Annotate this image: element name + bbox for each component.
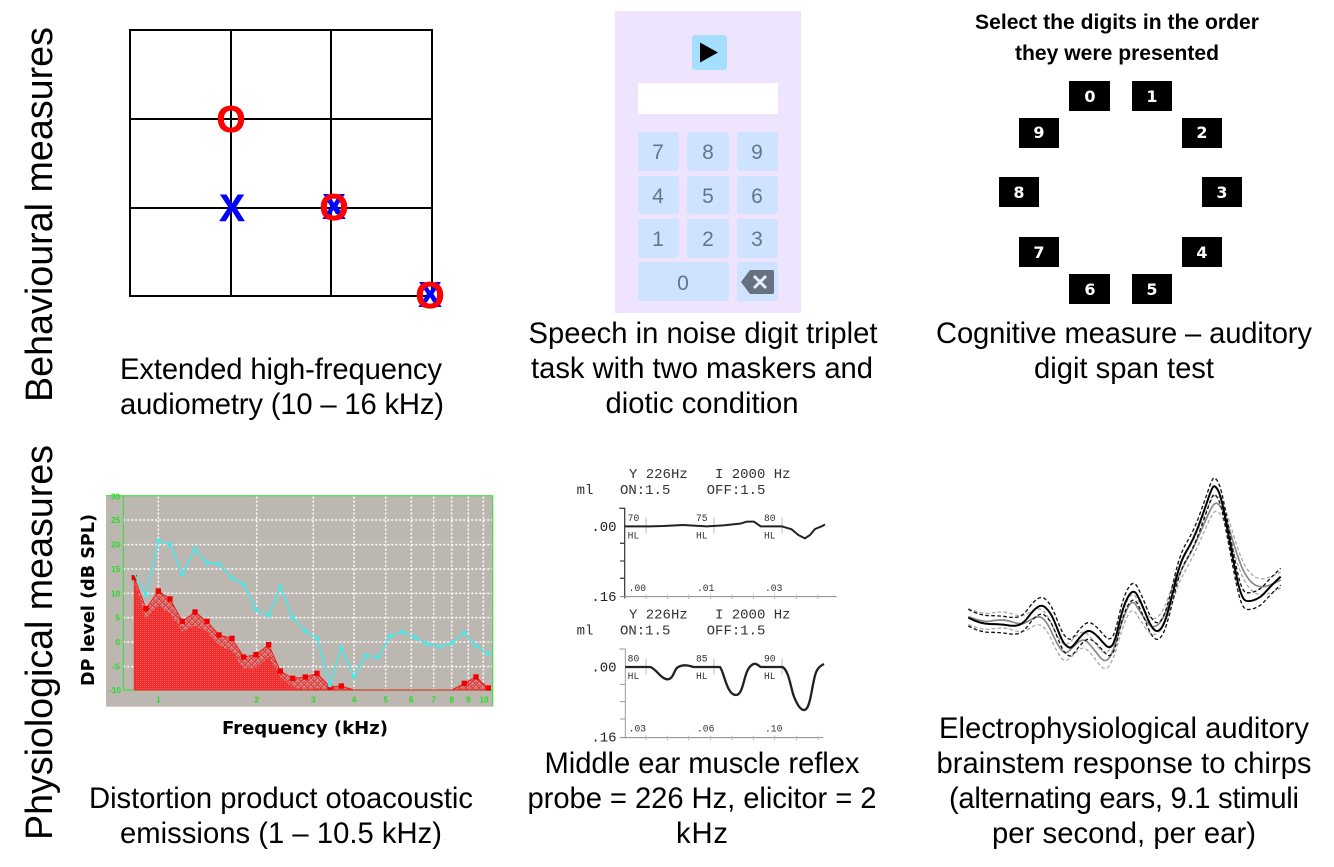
grey mean trace (968, 503, 1281, 661)
row label: physiological measures: Physiological measures (18, 445, 60, 840)
upper reflex trace: 80 (764, 513, 776, 524)
noise floor solid area (134, 580, 330, 690)
audiogram marker: overlapping X and O at centre: X (322, 186, 346, 227)
brainstem response waveforms (968, 478, 1281, 669)
digit buttons in a ring: 3 (1216, 183, 1228, 202)
y axis tick labels: -5 (112, 662, 120, 672)
panel: auditory brainstem response (936, 478, 1312, 850)
answer field (638, 83, 778, 114)
y axis title: DP level (dB SPL) (79, 514, 99, 686)
caption: speech in noise: task with two maskers and (531, 353, 873, 385)
caption: muscle reflex (528, 748, 876, 850)
DPOAE chart (106, 491, 493, 707)
caption: muscle reflex: kHz (676, 818, 728, 850)
lower reflex trace: HL (628, 671, 639, 682)
play button (692, 35, 727, 70)
y axis tick labels: 5 (115, 613, 120, 623)
caption: muscle reflex: probe = 226 Hz, elicitor = 2 (528, 783, 876, 815)
digit keys: 5 (702, 185, 714, 208)
digit buttons in a ring: 1 (1146, 87, 1158, 106)
x axis tick labels: 5 (383, 694, 388, 704)
upper reflex trace: Y 226Hz (629, 467, 688, 483)
x axis tick labels: 1 (156, 694, 161, 704)
caption: brainstem response: per second, per ear) (992, 818, 1256, 850)
lower reflex trace: .00 (591, 661, 617, 677)
lower reflex trace: .03 (629, 724, 646, 735)
cyan DP series (134, 538, 491, 687)
y axis tick labels: -10 (109, 685, 121, 695)
upper reflex trace (577, 467, 837, 606)
upper reflex trace: .01 (697, 583, 715, 594)
lower reflex trace: OFF:1.5 (707, 624, 765, 640)
digit span prompt (975, 11, 1259, 65)
caption: brainstem response: brainstem response to chirps (936, 748, 1312, 780)
y axis tick labels: 0 (115, 637, 120, 647)
caption: otoacoustic emissions: emissions (1 – 10.5 kHz) (120, 818, 442, 850)
digit buttons in a ring: 7 (1033, 243, 1045, 262)
lower reflex trace: .10 (765, 724, 783, 735)
lower reflex trace: HL (696, 671, 708, 682)
digit buttons in a ring: 4 (1196, 243, 1208, 262)
digit span prompt: Select the digits in the order (975, 11, 1259, 34)
digit keys: 2 (702, 228, 714, 251)
caption: brainstem response: (alternating ears, 9.1 stimuli (949, 783, 1299, 815)
digit keys: 3 (751, 228, 763, 251)
caption: audiometry: Extended high-frequency (120, 354, 442, 386)
y axis tick labels (109, 491, 121, 695)
x axis tick labels: 7 (431, 694, 436, 704)
y axis tick labels: 15 (111, 564, 121, 574)
panel: middle ear muscle reflex (528, 467, 876, 850)
caption: speech in noise: Speech in noise digit triplet (528, 318, 878, 350)
icon: backspace (741, 270, 774, 294)
digit keys (638, 132, 778, 301)
lower reflex trace: 85 (696, 654, 708, 665)
row label: behavioural measures: Behavioural measures (18, 27, 60, 402)
digit keys: 7 (652, 141, 664, 164)
digit keys: 8 (702, 141, 714, 164)
x axis tick labels: 9 (466, 694, 471, 704)
audiogram marker: blue X: X (219, 188, 245, 230)
digit buttons in a ring: 0 (1084, 87, 1096, 106)
digit span prompt: they were presented (1015, 42, 1219, 65)
keypad background (615, 11, 801, 313)
audiogram marker: red O: O (217, 99, 245, 140)
audiogram grid (130, 30, 432, 296)
caption: digit span: digit span test (1034, 353, 1214, 385)
upper reflex trace: 75 (696, 513, 708, 524)
red series markers (132, 575, 491, 691)
upper reflex trace: .00 (629, 583, 646, 594)
x axis tick labels: 10 (479, 694, 489, 704)
lower reflex trace: HL (764, 671, 776, 682)
x axis title: Frequency (kHz) (222, 719, 388, 739)
audiogram marker: overlapping X and O at corner: X (418, 274, 442, 315)
panel: distortion product otoacoustic emissions (79, 491, 493, 850)
digit keys: 4 (652, 185, 664, 208)
lower reflex trace: .06 (697, 724, 715, 735)
upper reflex trace: HL (628, 530, 639, 541)
audiogram marker: overlapping X and O at centre: x (326, 193, 340, 220)
digit buttons in a ring (999, 81, 1242, 304)
y axis tick labels: 30 (111, 491, 121, 501)
caption: muscle reflex: Middle ear muscle reflex (544, 748, 860, 780)
upper reflex trace: I 2000 Hz (715, 467, 791, 483)
upper reflex trace: .16 (591, 590, 617, 606)
caption: audiometry: audiometry (10 – 16 kHz) (120, 389, 444, 421)
panel: speech in noise digit triplet task (528, 11, 878, 420)
lower reflex trace: 90 (764, 654, 776, 665)
y axis tick labels: 25 (111, 515, 121, 525)
upper reflex trace: ml (577, 483, 593, 499)
lower reflex trace: Y 226Hz (629, 607, 688, 623)
digit buttons in a ring: 2 (1196, 123, 1208, 142)
caption: brainstem response: Electrophysiological auditory (939, 713, 1309, 745)
x axis tick labels: 3 (311, 694, 316, 704)
audiogram marker: overlapping X and O at corner: x (423, 281, 437, 308)
caption: otoacoustic emissions (89, 783, 473, 850)
caption: speech in noise (528, 318, 878, 420)
digit buttons in a ring: 9 (1033, 123, 1045, 142)
noise floor band (134, 578, 488, 690)
digit keys: 6 (751, 185, 763, 208)
x axis tick labels (156, 694, 489, 704)
black dashed confidence bounds (968, 478, 1281, 656)
digit keys: 0 (677, 272, 689, 295)
caption: otoacoustic emissions: Distortion product otoacoustic (89, 783, 473, 815)
lower reflex trace: ml (577, 624, 593, 640)
digit buttons in a ring: 8 (1013, 183, 1025, 202)
digit keys: 1 (652, 228, 664, 251)
x axis tick labels: 2 (254, 694, 259, 704)
upper reflex trace: .00 (591, 520, 617, 536)
lower reflex trace: I 2000 Hz (715, 607, 791, 623)
caption: audiometry (120, 354, 444, 421)
black mean trace (968, 486, 1281, 648)
x axis tick labels: 8 (449, 694, 454, 704)
audiogram marker: overlapping X and O at centre: O (320, 187, 348, 228)
grey dashed confidence bounds (968, 495, 1281, 669)
digit buttons in a ring: 5 (1146, 280, 1158, 299)
caption: digit span (936, 318, 1312, 385)
lower reflex trace: 80 (628, 654, 639, 665)
panel: auditory digit span test (936, 11, 1312, 385)
panel: extended high-frequency audiometry (120, 30, 444, 421)
upper reflex trace: .03 (765, 583, 783, 594)
upper reflex trace: ON:1.5 (620, 483, 670, 499)
x axis tick labels: 4 (352, 694, 357, 704)
upper reflex trace: HL (764, 530, 776, 541)
audiogram marker: overlapping X and O at corner: O (416, 275, 444, 316)
y axis tick labels: 10 (111, 588, 121, 598)
digit buttons in a ring: 6 (1084, 280, 1096, 299)
upper reflex trace: HL (696, 530, 708, 541)
lower reflex trace: .16 (591, 731, 617, 747)
reflex traces (577, 467, 837, 747)
caption: speech in noise: diotic condition (606, 388, 798, 420)
y axis tick labels: 20 (111, 540, 121, 550)
caption: digit span: Cognitive measure – auditory (936, 318, 1312, 350)
lower reflex trace: ON:1.5 (620, 624, 670, 640)
lower reflex trace (577, 607, 824, 747)
digit keys: 9 (751, 141, 763, 164)
caption: brainstem response (936, 713, 1312, 850)
upper reflex trace: 70 (628, 513, 639, 524)
x axis tick labels: 6 (409, 694, 414, 704)
upper reflex trace: OFF:1.5 (707, 483, 765, 499)
